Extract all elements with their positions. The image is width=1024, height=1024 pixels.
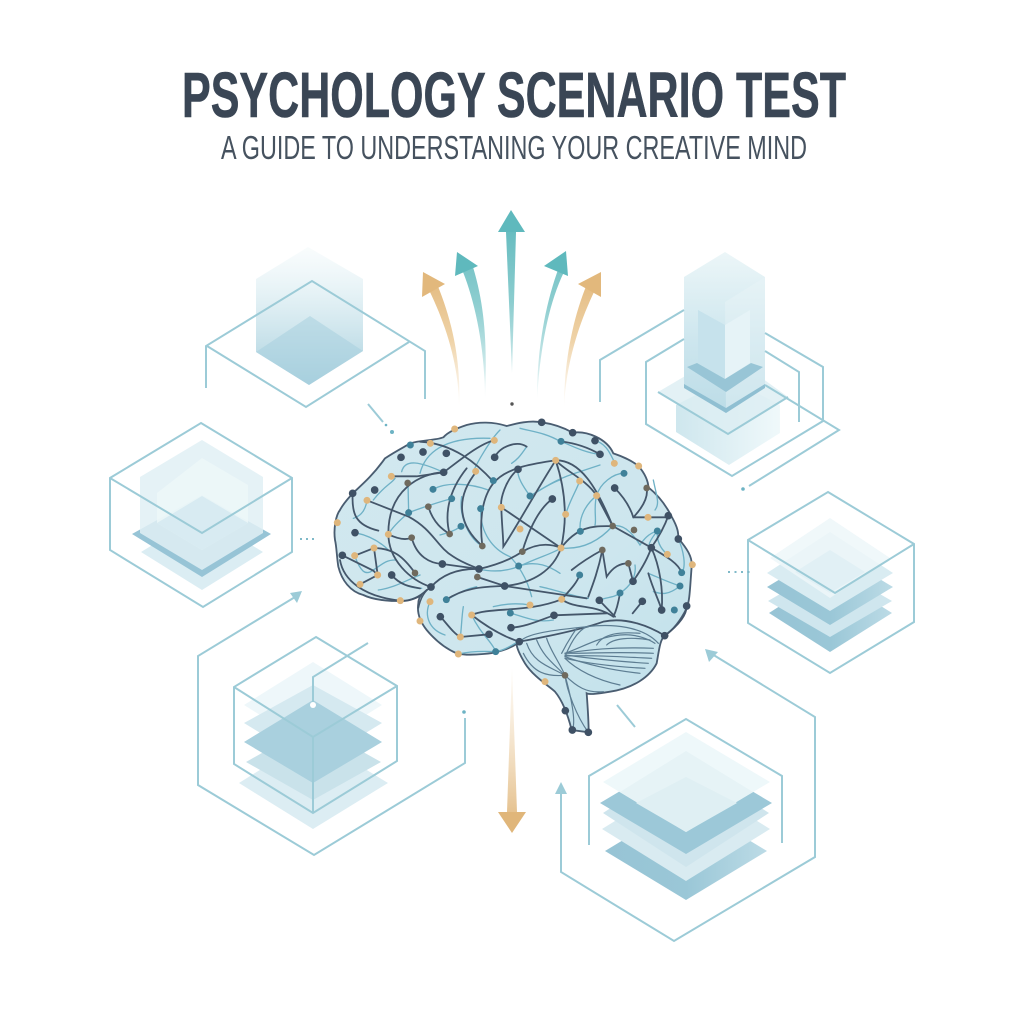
panel: bottom-left cube [198,591,466,855]
arrowhead [290,591,302,603]
cerebellum folds [520,626,658,732]
gold nodes [334,425,696,685]
outer line [198,594,465,855]
panel: top-left cube [206,247,425,407]
arrow: up right teal [537,251,568,400]
teal vessels [353,428,684,654]
arrow: up right gold [564,272,601,407]
dashes near brain [368,402,514,434]
brain illustration [334,418,696,736]
dot [741,487,745,491]
dash [617,705,635,727]
arrowhead: bottom right [555,782,567,794]
panel: left cube [110,423,318,607]
arrowhead: right box [705,649,718,662]
arrow: up left teal [455,252,486,400]
dotted connector [728,571,754,573]
dark pathways [340,440,687,642]
dotted connector [300,538,318,540]
subtitle: A GUIDE TO UNDERSTANING YOUR CREATIVE MIND [221,129,807,166]
panel: bottom-right cube [589,705,782,900]
arrow: to brain right [561,651,815,941]
dark nodes [338,418,690,736]
teal nodes [405,438,685,655]
brown nodes [404,480,650,679]
arrow: up left gold [422,272,459,407]
dot [462,710,466,714]
panel: right stacked cube [561,492,914,941]
arrow: up center teal [498,210,525,373]
panel: top-right column cube [600,252,839,491]
brain outline [334,422,692,732]
arrow: down gold [498,668,526,833]
